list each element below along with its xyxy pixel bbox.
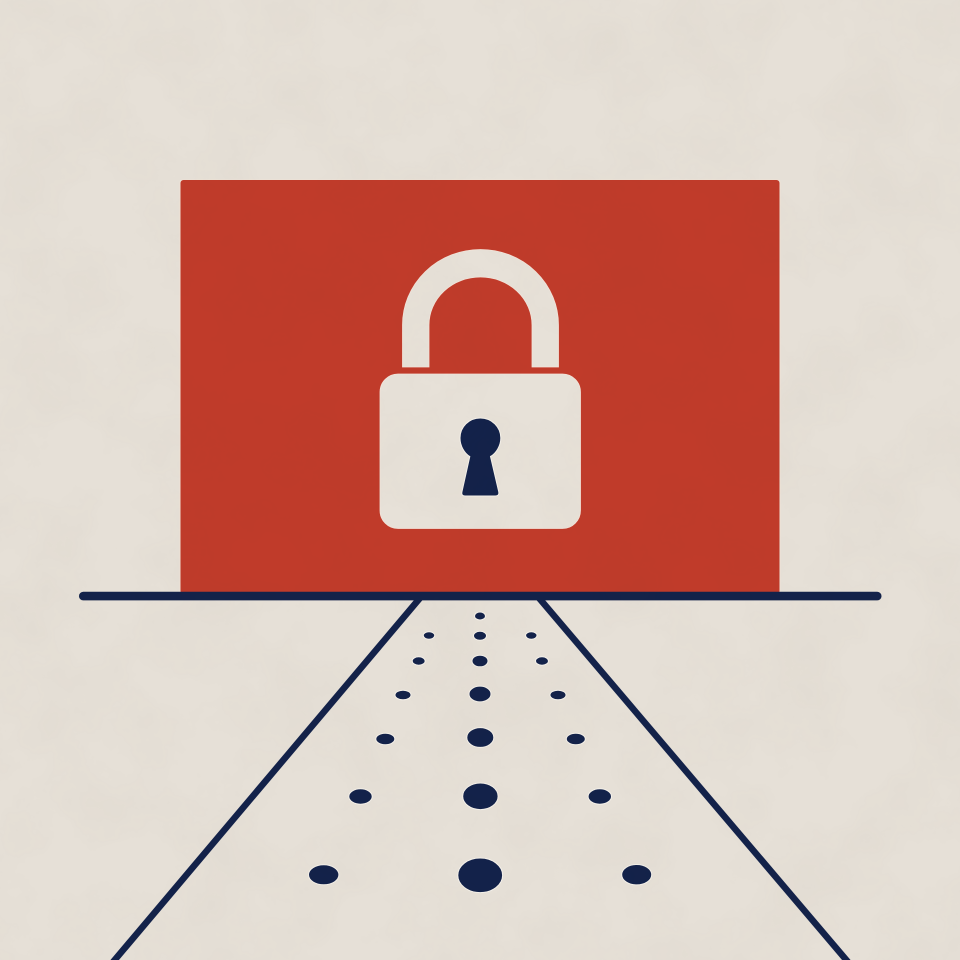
right road edge <box>539 598 848 960</box>
dots: right row <box>526 632 652 885</box>
dots: left row <box>308 632 435 885</box>
left road edge <box>113 598 420 960</box>
panel: red wall <box>180 180 780 594</box>
dots: centre row <box>458 612 503 893</box>
keyhole <box>460 418 501 496</box>
icon: padlock <box>380 249 580 528</box>
padlock body <box>380 374 580 528</box>
horizon line <box>79 592 882 600</box>
padlock shackle <box>402 249 558 367</box>
